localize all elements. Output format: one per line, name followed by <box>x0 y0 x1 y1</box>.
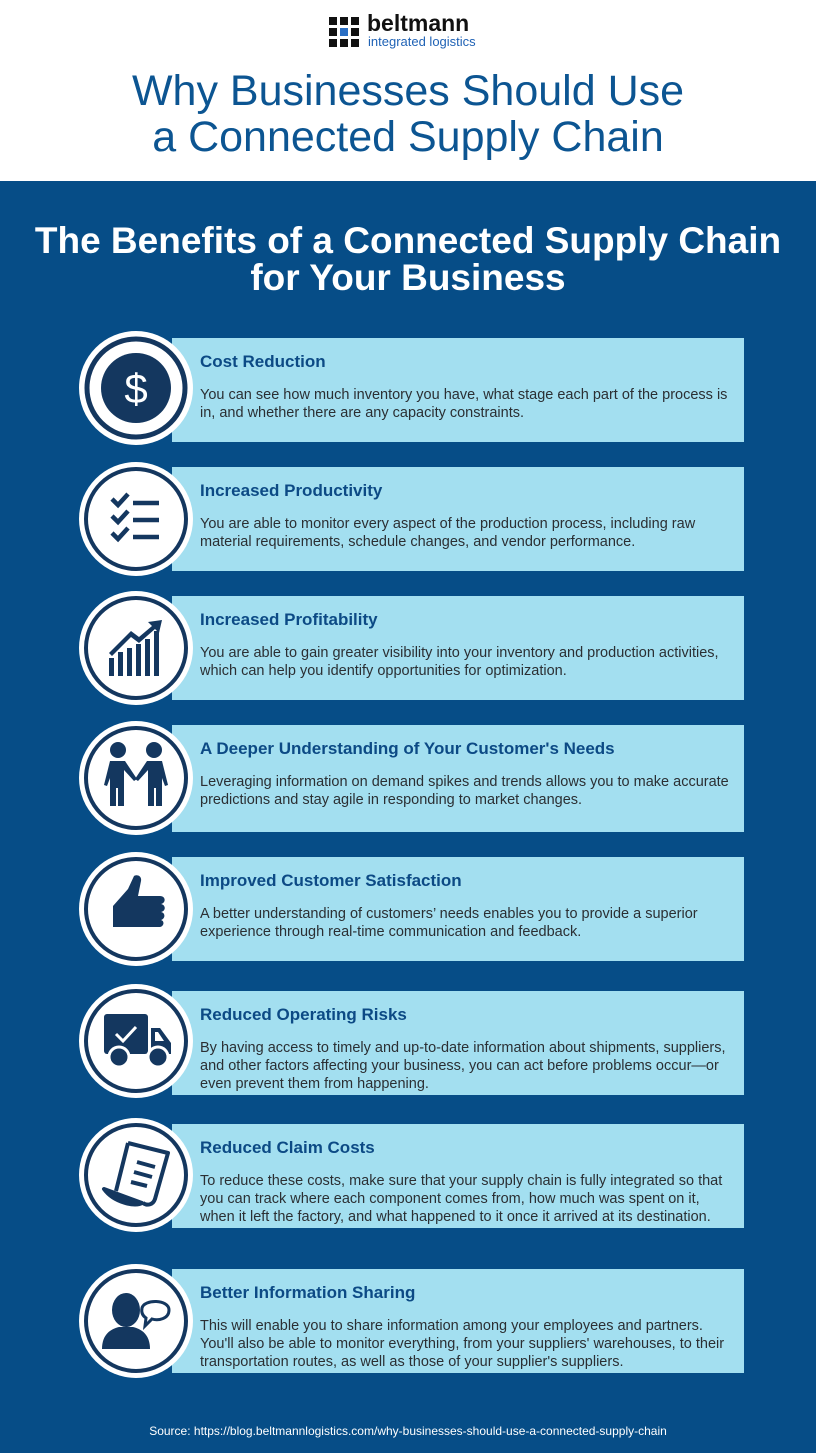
icon: handshake people <box>79 721 193 835</box>
subtitle: The Benefits of a Connected Supply Chain <box>35 220 781 261</box>
panel: satisfaction <box>172 857 744 961</box>
icon: checklist <box>79 462 193 576</box>
panel: information sharing <box>172 1269 744 1373</box>
panel: operating risks <box>172 991 744 1095</box>
panel: productivity: You are able to monitor every aspect of the production process, including raw material requirements, schedule changes, and vendor performance. <box>200 516 695 550</box>
panel: cost reduction <box>172 338 744 442</box>
logo: integrated logistics <box>368 34 476 49</box>
panel: cost reduction: You can see how much inventory you have, what stage each part of the process is in, and whether there are any capacity constraints. <box>200 387 727 421</box>
icon: dollar <box>79 331 193 445</box>
panel: satisfaction: A better understanding of customers’ needs enables you to provide a superior experience through real-time communication and feedback. <box>200 906 698 940</box>
panel: information sharing: This will enable you to share information among your employees and partners. You'll also be able to monitor everything, from your suppliers' warehouses, to their transportation routes, as well as those of your supplier's suppliers. <box>200 1318 724 1370</box>
panel: profitability: You are able to gain greater visibility into your inventory and production activities, which can help you identify opportunities for optimization. <box>200 645 719 679</box>
icon: document <box>79 1118 193 1232</box>
title: Why Businesses Should Use <box>132 67 684 115</box>
icon: person speech <box>79 1264 193 1378</box>
panel: productivity <box>172 467 744 571</box>
panel: productivity: Increased Productivity <box>200 481 382 500</box>
panel: operating risks: By having access to timely and up-to-date information about shipments, suppliers, and other factors affecting your business, you can act before problems occur—or even prevent them from happening. <box>200 1040 726 1092</box>
panel: claim costs: To reduce these costs, make sure that your supply chain is fully integrated so that you can track where each component comes from, how much was spent on it, when it left the factory, and what happened to it once it arrived at its destination. <box>200 1173 722 1225</box>
panel: profitability: Increased Profitability <box>200 610 378 629</box>
panel: information sharing: Better Information Sharing <box>200 1283 415 1302</box>
panel: claim costs <box>172 1124 744 1228</box>
panel: customer needs: Leveraging information on demand spikes and trends allows you to make accurate predictions and stay agile in responding to market changes. <box>200 774 729 808</box>
source: Source: https://blog.beltmannlogistics.com/why-businesses-should-use-a-connected-supply-chain <box>149 1424 667 1438</box>
logo: beltmann <box>367 10 469 36</box>
icon: growth chart <box>79 591 193 705</box>
subtitle <box>35 220 781 298</box>
icon: delivery truck <box>79 984 193 1098</box>
panel: operating risks: Reduced Operating Risks <box>200 1005 407 1024</box>
title: a Connected Supply Chain <box>152 113 664 161</box>
panel: cost reduction: Cost Reduction <box>200 352 326 371</box>
panel: satisfaction: Improved Customer Satisfaction <box>200 871 462 890</box>
panel: customer needs: A Deeper Understanding of Your Customer's Needs <box>200 739 615 758</box>
subtitle: for Your Business <box>250 257 566 298</box>
icon: thumbs up <box>79 852 193 966</box>
panel: claim costs: Reduced Claim Costs <box>200 1138 375 1157</box>
panel: profitability <box>172 596 744 700</box>
logo <box>329 10 476 49</box>
icon: dollar: $ <box>124 365 148 412</box>
panel: customer needs <box>172 725 744 832</box>
title <box>132 67 684 161</box>
